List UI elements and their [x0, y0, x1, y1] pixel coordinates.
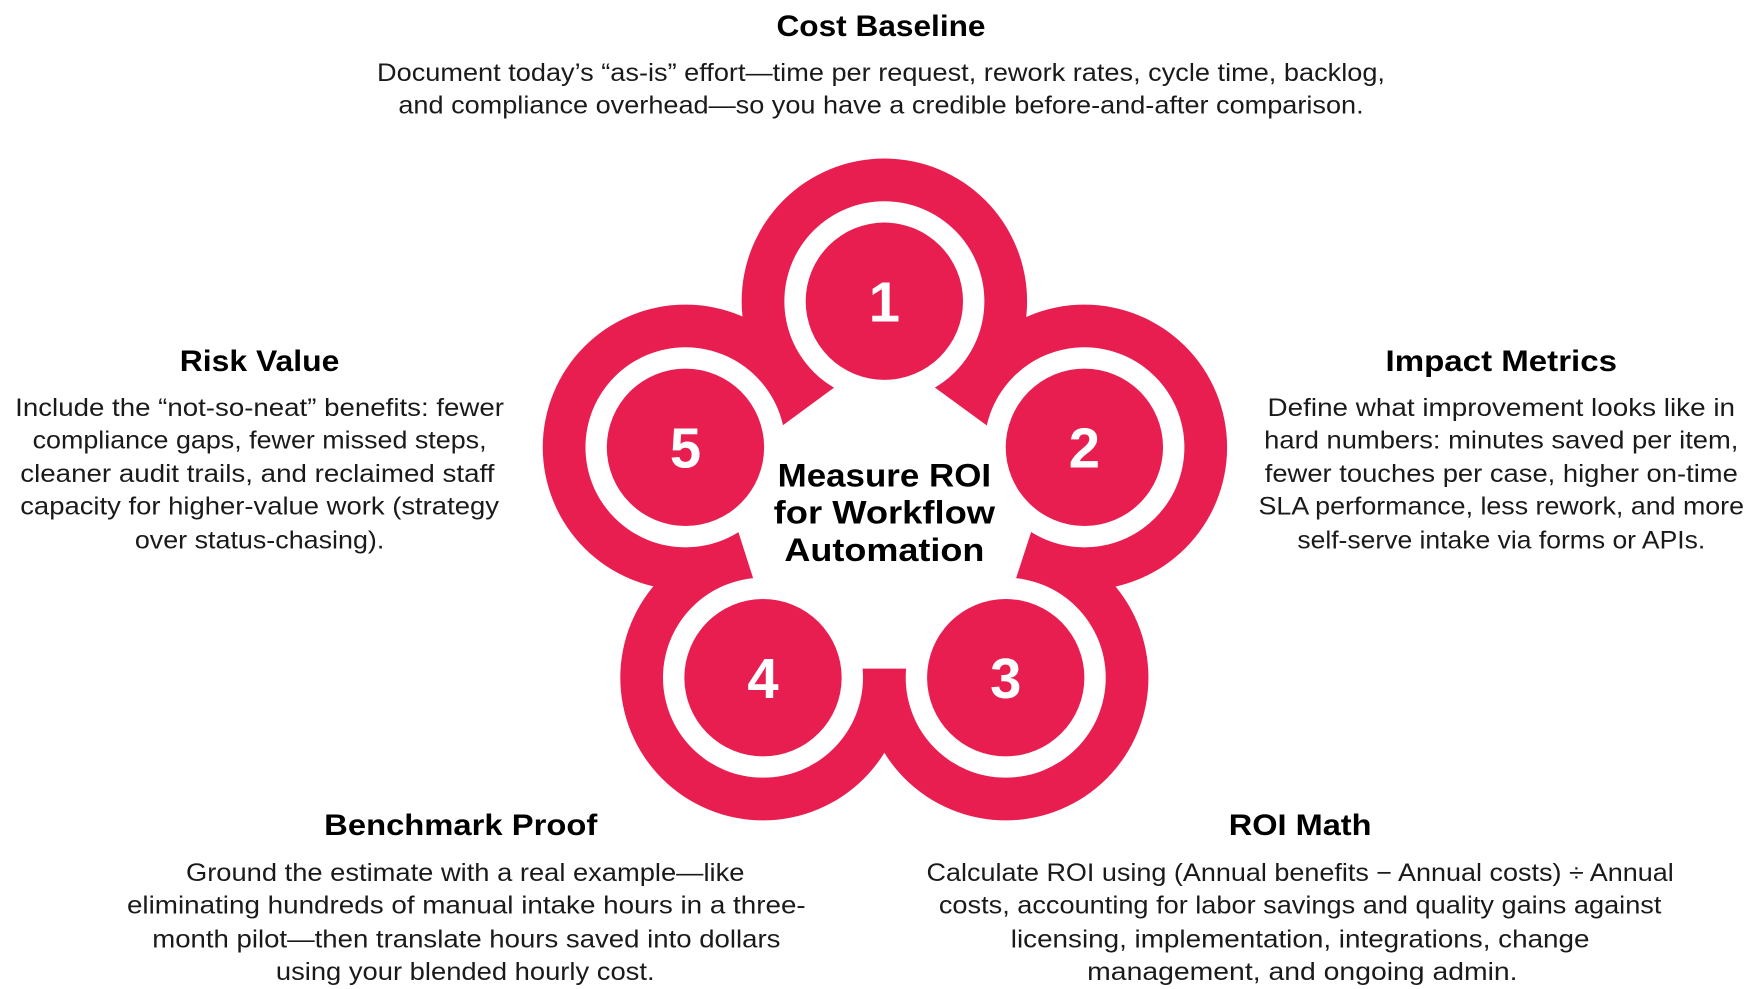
panel: benchmark proof: Ground the estimate with a real example—like — [186, 860, 744, 887]
panel: impact metrics: Impact Metrics — [1386, 346, 1617, 378]
ring 5 — [543, 305, 828, 590]
panel: impact metrics: self-serve intake via forms or APIs. — [1297, 527, 1705, 554]
panel: roi math: management, and ongoing admin. — [1087, 959, 1518, 986]
panel: cost baseline: Cost Baseline — [776, 11, 986, 43]
panel: benchmark proof: month pilot—then translate hours saved into dollars — [152, 926, 780, 953]
panel: benchmark proof: using your blended hourly cost. — [276, 959, 655, 986]
circle 1: 1 — [869, 270, 900, 333]
panel: benchmark proof: Benchmark Proof — [324, 810, 598, 842]
panel: risk value: over status-chasing). — [135, 527, 384, 554]
ring 2 — [942, 305, 1227, 590]
panel: roi math: ROI Math — [1229, 810, 1371, 842]
ring 1 — [742, 159, 1027, 444]
panel: cost baseline: and compliance overhead—so you have a credible before-and-after comparison. — [398, 93, 1364, 120]
panel: impact metrics — [1259, 346, 1744, 554]
panel: benchmark proof: eliminating hundreds of manual intake hours in a three- — [127, 893, 806, 920]
flower diagram — [543, 159, 1227, 820]
panel: cost baseline: Document today’s “as-is” effort—time per request, rework rates, cycle time, backlog, — [377, 60, 1385, 87]
panel: impact metrics: Define what improvement looks like in — [1268, 395, 1735, 422]
panel: cost baseline — [377, 11, 1385, 120]
circle 2 — [1006, 369, 1163, 526]
panel: roi math: costs, accounting for labor savings and quality gains against — [939, 893, 1662, 920]
center title: Measure ROI — [778, 458, 991, 494]
panel: risk value: capacity for higher-value work (strategy — [20, 494, 500, 521]
circle 3 — [927, 599, 1084, 756]
panel: risk value: compliance gaps, fewer missed steps, — [33, 427, 487, 454]
ring 3 — [863, 535, 1148, 820]
panel: benchmark proof — [127, 810, 806, 986]
circle 2: 2 — [1069, 417, 1100, 480]
panel: roi math: Calculate ROI using (Annual benefits − Annual costs) ÷ Annual — [927, 860, 1674, 887]
panel: risk value: Include the “not-so-neat” benefits: fewer — [15, 395, 504, 422]
panel: risk value: Risk Value — [180, 346, 339, 378]
panel: impact metrics: hard numbers: minutes saved per item, — [1264, 427, 1738, 454]
panel: impact metrics: SLA performance, less rework, and more — [1259, 494, 1744, 521]
circle 1 — [806, 223, 963, 380]
center white area — [719, 351, 1051, 669]
panel: risk value — [15, 346, 504, 554]
panel: impact metrics: fewer touches per case, higher on-time — [1265, 461, 1738, 488]
circle 4 — [684, 599, 842, 756]
panel: risk value: cleaner audit trails, and reclaimed staff — [20, 461, 495, 488]
center title — [774, 458, 996, 568]
ring 4 — [620, 535, 906, 820]
circle 5: 5 — [670, 417, 701, 480]
center title: for Workflow — [774, 495, 996, 531]
panel: roi math — [927, 810, 1674, 986]
circle 3: 3 — [990, 647, 1021, 710]
center title: Automation — [784, 532, 984, 568]
panel: roi math: licensing, implementation, integrations, change — [1011, 926, 1589, 953]
circle 5 — [607, 369, 764, 526]
circle 4: 4 — [747, 647, 779, 710]
